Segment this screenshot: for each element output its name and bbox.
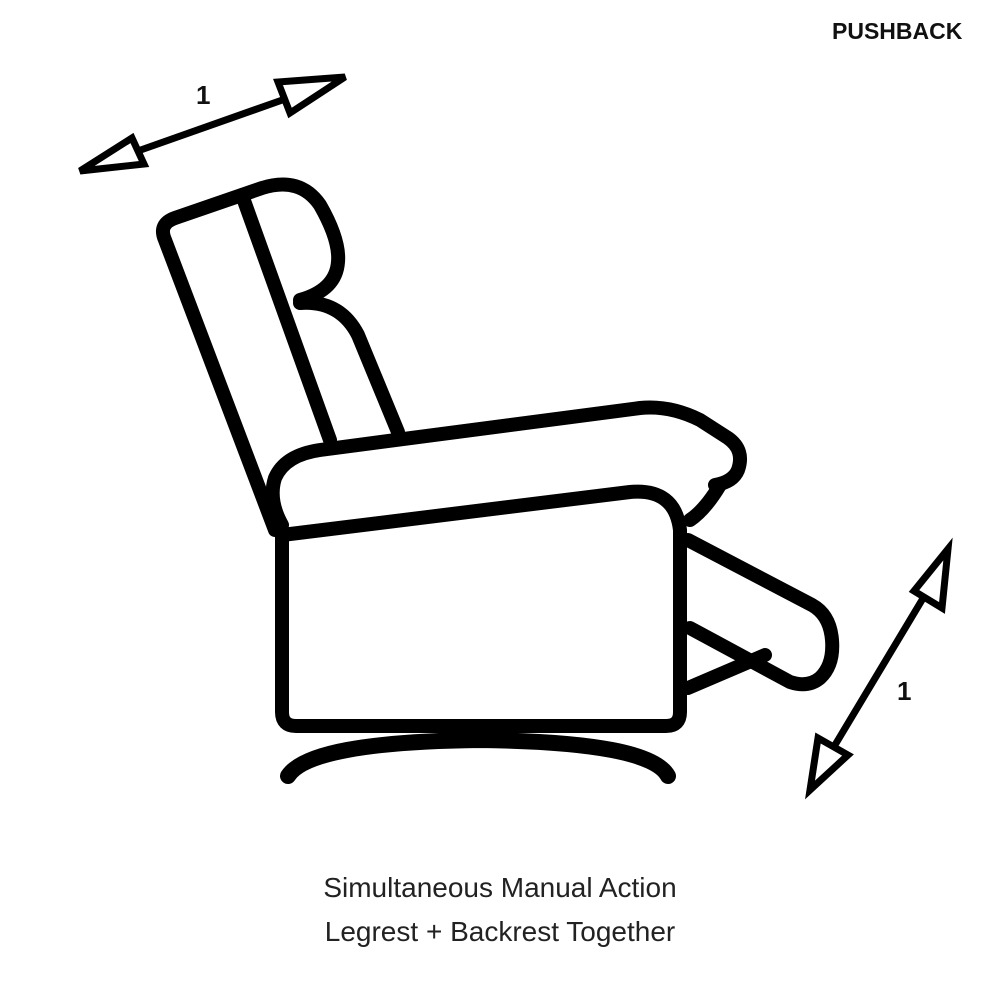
label: pushback: PUSHBACK: [832, 18, 962, 44]
legrest support: [688, 655, 765, 688]
legrest: [688, 485, 832, 684]
base arc: [288, 740, 668, 776]
backrest outer: [163, 184, 338, 530]
arrow: backrest movement: [80, 77, 345, 171]
chair outline: [163, 184, 832, 726]
armrest: [273, 408, 740, 525]
caption: Simultaneous Manual Action: [323, 872, 677, 903]
backrest divider: [242, 195, 330, 440]
arrow: legrest movement: [810, 549, 948, 790]
seat base box: [282, 492, 680, 726]
caption: Legrest + Backrest Together: [325, 916, 675, 947]
label: 1 right: 1: [897, 676, 911, 706]
lower back cushion: [300, 303, 398, 432]
caption: [323, 872, 677, 947]
label: 1 top: 1: [196, 80, 210, 110]
